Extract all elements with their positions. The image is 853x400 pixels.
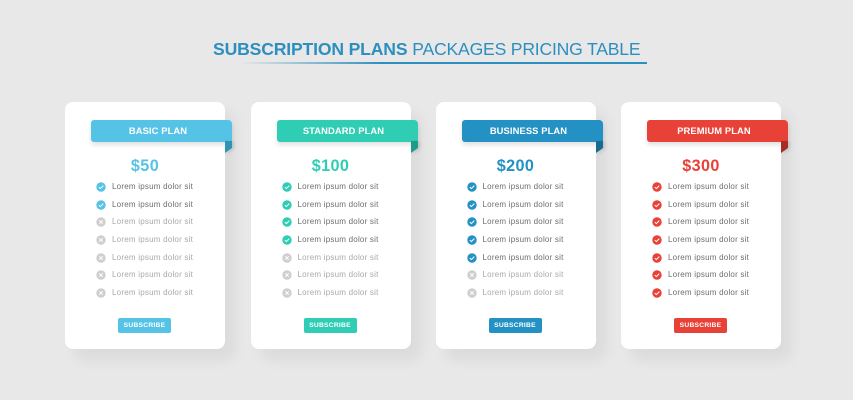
plan name: PREMIUM PLAN xyxy=(677,125,751,136)
ribbon xyxy=(91,120,232,142)
feature: excluded: Lorem ipsum dolor sit xyxy=(298,270,379,279)
subscribe button: SUBSCRIBE xyxy=(494,322,536,329)
feature: excluded: Lorem ipsum dolor sit xyxy=(482,288,564,297)
feature: excluded: Lorem ipsum dolor sit xyxy=(298,288,379,297)
card background xyxy=(621,102,781,349)
feature: included: Lorem ipsum dolor sit xyxy=(298,200,379,209)
subscribe button: SUBSCRIBE xyxy=(680,322,721,329)
feature: included: Lorem ipsum dolor sit xyxy=(668,217,749,226)
subscribe button: SUBSCRIBE xyxy=(124,322,165,329)
ribbon xyxy=(647,120,788,142)
subscribe button xyxy=(674,318,727,333)
price: $50 xyxy=(131,157,159,175)
subscribe button xyxy=(118,318,171,333)
price: $300 xyxy=(682,157,720,175)
feature: included: Lorem ipsum dolor sit xyxy=(482,217,564,226)
feature: excluded: Lorem ipsum dolor sit xyxy=(112,217,193,226)
panel: basic plan xyxy=(65,102,236,358)
feature: included: Lorem ipsum dolor sit xyxy=(668,235,749,244)
feature: excluded: Lorem ipsum dolor sit xyxy=(112,288,193,297)
subscribe button xyxy=(304,318,356,333)
panel: premium plan xyxy=(621,102,792,358)
feature: excluded: Lorem ipsum dolor sit xyxy=(112,270,193,279)
ribbon fold xyxy=(781,141,791,153)
feature: included: Lorem ipsum dolor sit xyxy=(482,235,564,244)
ribbon fold xyxy=(411,141,421,153)
feature: excluded: Lorem ipsum dolor sit xyxy=(298,253,379,262)
ribbon xyxy=(276,120,418,142)
feature: included: Lorem ipsum dolor sit xyxy=(112,200,193,209)
ribbon fold xyxy=(225,141,235,153)
feature: included: Lorem ipsum dolor sit xyxy=(482,182,564,191)
feature: included: Lorem ipsum dolor sit xyxy=(668,253,749,262)
feature: included: Lorem ipsum dolor sit xyxy=(298,217,379,226)
plan name: BASIC PLAN xyxy=(129,125,187,136)
feature: included: Lorem ipsum dolor sit xyxy=(668,182,749,191)
panel: business plan xyxy=(436,102,607,358)
feature: included: Lorem ipsum dolor sit xyxy=(668,270,749,279)
card background xyxy=(65,102,225,349)
title: SUBSCRIPTION PLANS PACKAGES PRICING TABLE xyxy=(213,39,640,59)
feature: included: Lorem ipsum dolor sit xyxy=(482,253,564,262)
feature: included: Lorem ipsum dolor sit xyxy=(298,182,379,191)
ribbon fold xyxy=(596,141,606,153)
card background xyxy=(436,102,596,349)
card background xyxy=(250,102,410,349)
price: $200 xyxy=(497,157,534,175)
feature: included: Lorem ipsum dolor sit xyxy=(668,200,749,209)
feature: excluded: Lorem ipsum dolor sit xyxy=(112,253,193,262)
plan name: BUSINESS PLAN xyxy=(490,125,567,136)
plan name: STANDARD PLAN xyxy=(303,125,384,136)
price: $100 xyxy=(312,157,349,175)
subscribe button: SUBSCRIBE xyxy=(309,322,351,329)
title underline xyxy=(240,62,647,64)
feature: included: Lorem ipsum dolor sit xyxy=(482,200,564,209)
panel: standard plan xyxy=(251,102,422,358)
feature: included: Lorem ipsum dolor sit xyxy=(668,288,749,297)
feature: included: Lorem ipsum dolor sit xyxy=(298,235,379,244)
feature: included: Lorem ipsum dolor sit xyxy=(112,182,193,191)
feature: excluded: Lorem ipsum dolor sit xyxy=(482,270,564,279)
ribbon xyxy=(462,120,602,142)
feature: excluded: Lorem ipsum dolor sit xyxy=(112,235,193,244)
subscribe button xyxy=(488,318,542,333)
